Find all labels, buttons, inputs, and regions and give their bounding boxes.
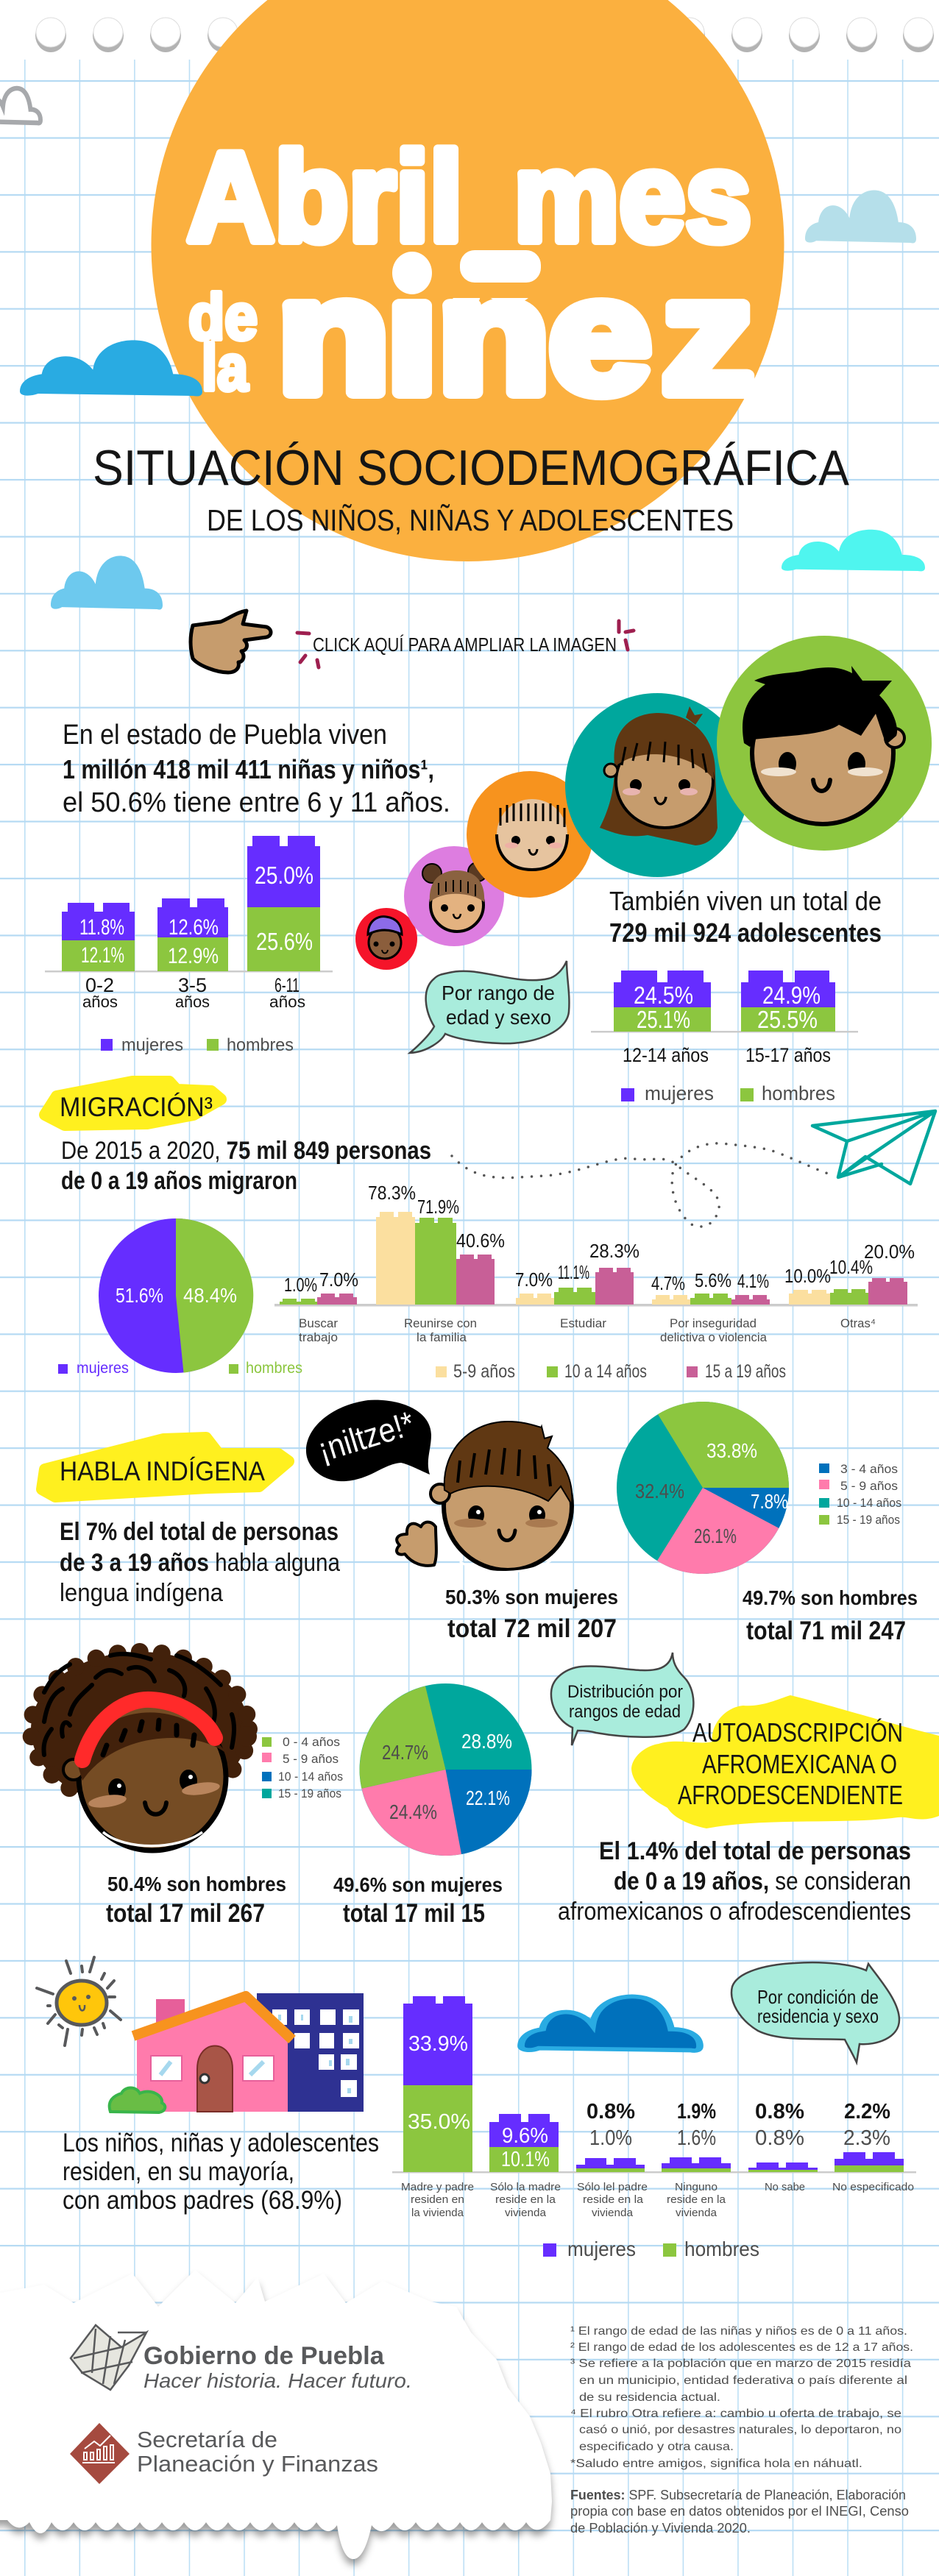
bar: 3-5 años xyxy=(157,898,228,1011)
heading: autoadscripción afromexicana xyxy=(631,1695,939,1828)
click call to action: CLICK AQUÍ PARA AMPLIAR LA IMAGEN xyxy=(313,634,617,656)
text: Puebla children total xyxy=(63,720,450,818)
pie chart: lengua indígena by age: 32.4% xyxy=(635,1480,684,1502)
text: habla indígena summary xyxy=(60,1518,340,1607)
pie chart: afro by age: 24.7% xyxy=(382,1741,428,1764)
circle: teal, girl face xyxy=(565,693,749,877)
bar: sólo el padre: 1.0% xyxy=(589,2126,632,2150)
text: adolescents total: 729 mil 924 adolescentes xyxy=(609,918,882,948)
icon: pink house xyxy=(133,1996,292,2112)
legend: lengua indígena ages xyxy=(819,1462,901,1527)
legend: pie migration xyxy=(58,1360,302,1377)
legend: adolescents: hombres xyxy=(762,1082,835,1104)
text: residencia summary: Los niños, niñas y adolescentes xyxy=(63,2129,379,2157)
cloud: pale blue xyxy=(805,190,916,244)
title: Abril mes de la niñez: niñez xyxy=(277,244,754,427)
circle: green, boy face xyxy=(717,636,932,851)
legend: mujeres / hombres: mujeres xyxy=(121,1035,183,1055)
title: Abril mes de la niñez: de xyxy=(188,280,258,353)
text: habla indígena summary: lengua indígena xyxy=(60,1579,223,1607)
speech bubble: por condición de residencia y sexo: residencia y sexo xyxy=(757,2005,879,2027)
circle: orange, child face xyxy=(467,771,593,898)
bar: ninguno: 1.9% xyxy=(677,2100,716,2123)
legend: age groups migration xyxy=(436,1361,786,1382)
speech bubble: distribución por rangos de edad xyxy=(551,1653,693,1745)
bar: no especificado: No especificado xyxy=(832,2181,914,2193)
group: inseguridad delictiva o violencia xyxy=(651,1269,770,1344)
bar: 0-2 años xyxy=(62,903,135,1011)
legend: mujeres / hombres: hombres xyxy=(227,1035,294,1055)
group: buscar trabajo: trabajo xyxy=(299,1330,338,1344)
heading: habla indígena: HABLA INDÍGENA xyxy=(60,1456,265,1486)
group: buscar trabajo: 1.0% xyxy=(284,1274,317,1296)
bar: 15-17 años: 24.9% xyxy=(762,982,821,1009)
pie chart: afro by age: 22.1% xyxy=(466,1786,510,1809)
speech bubble: por condición de residencia y sexo: Por condición de xyxy=(757,1986,879,2008)
bar: 12-14 años xyxy=(614,971,711,1066)
legend: age groups migration: 10 a 14 años xyxy=(564,1361,647,1382)
group: reunirse con la familia: la familia xyxy=(417,1330,467,1344)
text: afromexicanos summary: El 1.4% del total de personas xyxy=(599,1837,911,1865)
bar: 12-14 años: 25.1% xyxy=(637,1006,690,1033)
group: reunirse con la familia: 40.6% xyxy=(456,1230,505,1252)
cloud: dark blue xyxy=(521,1996,700,2051)
legend: afro ages: 10 - 14 años xyxy=(278,1770,343,1784)
orange sun circle xyxy=(152,0,784,561)
legend: afro ages: 15 - 19 años xyxy=(278,1786,341,1800)
pie chart: afro by age: 24.4% xyxy=(389,1800,437,1823)
text: habla indígena summary: de 3 a 19 años habla alguna xyxy=(60,1549,340,1577)
group: estudiar: 28.3% xyxy=(589,1240,639,1262)
bar: 0-2 años: años xyxy=(82,993,118,1011)
sources xyxy=(570,2488,909,2536)
footnotes: especificado y otra causa. xyxy=(579,2441,734,2453)
title: Abril mes de la niñez: Abril xyxy=(187,127,463,268)
footnotes: ¹ El rango de edad de las niñas y niños es de 0 a 11 años. xyxy=(570,2325,907,2338)
group: estudiar xyxy=(515,1240,639,1330)
panel: torn white paper xyxy=(0,2270,552,2559)
heading: migración xyxy=(45,1082,221,1125)
bar: 0-2 años: 0-2 xyxy=(85,974,114,996)
pie chart: migration by sex: 48.4% xyxy=(183,1284,237,1307)
stat: mujeres habla indígena xyxy=(445,1586,618,1643)
stat: hombres afro: 50.4% son hombres xyxy=(107,1873,286,1895)
bar: sólo la madre: vivienda xyxy=(505,2207,547,2219)
footnotes xyxy=(570,2325,913,2470)
group: buscar trabajo: 7.0% xyxy=(319,1269,358,1291)
group: estudiar: 11.1% xyxy=(558,1261,589,1283)
footnotes: en un municipio, entidad federativa o país diferente al xyxy=(579,2374,907,2387)
title: Abril mes de la niñez: la xyxy=(202,331,249,404)
logo: Gobierno de Puebla: Gobierno de Puebla xyxy=(143,2342,385,2370)
group: otras xyxy=(784,1241,915,1330)
bar chart: adolescents by age and sex xyxy=(591,971,858,1066)
bar: madre y padre: Madre y padre xyxy=(401,2181,474,2193)
bar: 6-11 años xyxy=(247,836,320,1011)
title: Abril mes de la niñez xyxy=(187,127,754,427)
footnotes: *Saludo entre amigos, significa hola en náhuatl. xyxy=(570,2458,862,2470)
bar: ninguno: Ninguno xyxy=(675,2181,717,2193)
bar: sólo la madre xyxy=(489,2114,561,2219)
speech bubble: por rango de edad y sexo: Por rango de xyxy=(442,982,555,1004)
sources: propia con base en datos obtenidos por el INEGI, Censo xyxy=(570,2504,909,2519)
group: otras: 20.0% xyxy=(864,1241,915,1263)
group: reunirse con la familia: 71.9% xyxy=(417,1196,459,1218)
stat: hombres afro xyxy=(106,1873,286,1928)
pie chart: lengua indígena by age: 33.8% xyxy=(706,1439,757,1462)
notebook holes xyxy=(35,18,934,52)
footnotes: de su residencia actual. xyxy=(579,2391,720,2404)
speech bubble: por rango de edad y sexo xyxy=(410,961,569,1053)
icon: bush xyxy=(110,2088,165,2112)
icon: gobierno emblem xyxy=(71,2325,146,2390)
circle: red, baby face xyxy=(355,908,417,970)
bar: sólo el padre xyxy=(576,2100,648,2219)
sources: Fuentes: SPF. Subsecretaría de Planeación, Elaboración xyxy=(570,2488,906,2502)
pie chart: lengua indígena by age: 26.1% xyxy=(694,1525,737,1547)
legend: age groups migration: 5-9 años xyxy=(453,1361,515,1382)
heading: migración: MIGRACIÓN³ xyxy=(60,1092,213,1122)
legend: afro ages: 5 - 9 años xyxy=(283,1752,339,1766)
circle: pink, toddler face xyxy=(404,846,504,946)
icon: pointing hand xyxy=(191,611,271,673)
speech bubble: niltze: ¡niltze!* xyxy=(313,1404,419,1469)
pie chart: lengua indígena by age xyxy=(617,1402,789,1574)
group: inseguridad delictiva o violencia: 4.7% xyxy=(651,1272,685,1294)
logo: Secretaría de Planeación y Finanzas xyxy=(70,2423,378,2484)
sources: de Población y Vivienda 2020. xyxy=(570,2521,751,2536)
legend: adolescents: mujeres xyxy=(645,1082,714,1104)
bar: no sabe: 0.8% xyxy=(755,2126,804,2150)
bar: no sabe: 0.8% xyxy=(755,2100,804,2123)
group: buscar trabajo xyxy=(280,1269,358,1344)
bar chart: residence condition xyxy=(392,1996,916,2219)
bar: madre y padre: 35.0% xyxy=(408,2110,470,2134)
bar: sólo el padre: Sólo lel padre xyxy=(577,2181,648,2193)
bar: madre y padre: residen en xyxy=(411,2193,464,2206)
bar: 3-5 años: años xyxy=(175,993,210,1011)
stat: mujeres habla indígena: 50.3% son mujeres xyxy=(445,1586,618,1608)
cloud: blue xyxy=(20,340,202,397)
icon: boy face with waving hand xyxy=(397,1422,572,1572)
icon: apartment building xyxy=(257,1993,364,2112)
footnotes: ² El rango de edad de los adolescentes es de 12 a 17 años. xyxy=(570,2341,913,2354)
legend: residencia: mujeres xyxy=(567,2238,636,2260)
legend: age groups migration: 15 a 19 años xyxy=(705,1361,786,1382)
bar: sólo el padre: reside en la xyxy=(583,2193,644,2206)
subheading: DE LOS NIÑOS, NIÑAS Y ADOLESCENTES xyxy=(207,503,734,537)
logo: Gobierno de Puebla xyxy=(71,2325,412,2392)
dotted flight path xyxy=(452,1143,832,1227)
stat: mujeres afro: 49.6% son mujeres xyxy=(333,1873,503,1896)
heading: autoadscripción afromexicana: AFROMEXICANA O xyxy=(702,1749,897,1779)
bar: 6-11 años: años xyxy=(269,993,305,1011)
pie chart: afro by age xyxy=(359,1683,531,1856)
group: inseguridad delictiva o violencia: 5.6% xyxy=(695,1269,731,1291)
group: otras: Otras⁴ xyxy=(840,1316,876,1330)
legend: lengua indígena ages: 3 - 4 años xyxy=(840,1462,898,1476)
bar: no especificado: 2.3% xyxy=(843,2126,890,2150)
text: Puebla children total: 1 millón 418 mil 411 niñas y niños¹, xyxy=(63,754,434,784)
text: residencia summary: con ambos padres (68.9%) xyxy=(63,2186,342,2215)
speech bubble: por condición de residencia y sexo xyxy=(731,1962,899,2062)
text: adolescents total xyxy=(609,886,882,948)
bar chart: reasons for migrating xyxy=(274,1182,918,1344)
text: residencia summary: residen, en su mayoría, xyxy=(63,2157,294,2186)
legend: mujeres / hombres xyxy=(101,1035,294,1055)
bar: sólo la madre: 10.1% xyxy=(501,2148,550,2171)
stat: hombres habla indígena xyxy=(743,1586,918,1645)
bar: madre y padre: la vivienda xyxy=(411,2207,464,2219)
bar: no especificado xyxy=(832,2100,914,2193)
legend: residencia xyxy=(543,2238,759,2260)
text: afromexicanos summary xyxy=(558,1837,911,1926)
text: residencia summary xyxy=(63,2129,379,2215)
footnotes: ⁴ El rubro Otra refiere a: cambio u oferta de trabajo, se xyxy=(570,2408,901,2420)
legend: lengua indígena ages: 10 - 14 años xyxy=(837,1496,901,1510)
stat: hombres habla indígena: total 71 mil 247 xyxy=(746,1617,906,1645)
text: migración summary: De 2015 a 2020, 75 mil 849 personas xyxy=(61,1137,431,1165)
bar: no sabe xyxy=(748,2100,818,2193)
text: migración summary xyxy=(61,1137,431,1195)
bar: 6-11 años: 25.6% xyxy=(256,928,313,955)
bar: 0-2 años: 12.1% xyxy=(81,943,124,968)
click call to action xyxy=(297,621,634,667)
group: otras: 10.4% xyxy=(829,1256,873,1278)
stat: mujeres afro: total 17 mil 15 xyxy=(343,1899,485,1928)
group: inseguridad delictiva o violencia: 4.1% xyxy=(737,1270,769,1292)
group: reunirse con la familia xyxy=(368,1182,505,1344)
legend: afro ages: 0 - 4 años xyxy=(283,1735,340,1749)
footnotes: ³ Se refiere a la población que en marzo de 2015 residía xyxy=(570,2357,911,2370)
bar chart: children by age and sex xyxy=(45,836,333,1011)
logo: Secretaría de Planeación y Finanzas: Planeación y Finanzas xyxy=(137,2451,378,2477)
group: otras: 10.0% xyxy=(784,1265,831,1287)
legend: pie migration: mujeres xyxy=(77,1360,129,1377)
icon: waving hand xyxy=(397,1522,436,1566)
icon: paper plane xyxy=(812,1111,935,1184)
text: habla indígena summary: El 7% del total de personas xyxy=(60,1518,339,1546)
legend: lengua indígena ages: 15 - 19 años xyxy=(837,1513,900,1527)
bar: madre y padre xyxy=(401,1996,474,2219)
bar: sólo el padre: 0.8% xyxy=(587,2100,635,2123)
group: estudiar: Estudiar xyxy=(560,1316,606,1330)
group: buscar trabajo: Buscar xyxy=(299,1316,338,1330)
logo: Gobierno de Puebla: Hacer historia. Hacer futuro. xyxy=(143,2369,412,2392)
group: inseguridad delictiva o violencia: delictiva o violencia xyxy=(660,1330,768,1344)
bar: ninguno: vivienda xyxy=(676,2207,717,2219)
bar: 6-11 años: 25.0% xyxy=(255,862,313,889)
stat: mujeres habla indígena: total 72 mil 207 xyxy=(447,1614,617,1643)
bar: 3-5 años: 12.6% xyxy=(169,915,219,940)
cloud: gray outline xyxy=(0,88,40,123)
text: adolescents total: También viven un total de xyxy=(609,886,882,916)
bar: 3-5 años: 3-5 xyxy=(178,974,207,996)
group: reunirse con la familia: Reunirse con xyxy=(404,1316,477,1330)
bar: ninguno: reside en la xyxy=(667,2193,726,2206)
cloud: cyan xyxy=(782,530,925,571)
bar: 15-17 años: 25.5% xyxy=(757,1006,818,1033)
title: Abril mes de la niñez: mes xyxy=(514,127,751,268)
bar: 15-17 años xyxy=(741,971,835,1066)
legend: pie migration: hombres xyxy=(246,1360,302,1377)
stat: hombres habla indígena: 49.7% son hombres xyxy=(743,1586,918,1609)
stat: hombres afro: total 17 mil 267 xyxy=(106,1899,265,1928)
bar: 0-2 años: 11.8% xyxy=(79,915,124,940)
icon: sun xyxy=(37,1957,121,2045)
cloud: sky blue xyxy=(51,556,163,610)
logo: Secretaría de Planeación y Finanzas: Secretaría de xyxy=(137,2427,277,2452)
bar: ninguno: 1.6% xyxy=(677,2126,716,2150)
pie chart: afro by age: 28.8% xyxy=(461,1730,512,1753)
bar: 6-11 años: 6-11 xyxy=(274,974,300,996)
bar: no sabe: No sabe xyxy=(765,2181,805,2193)
text: afromexicanos summary: de 0 a 19 años, se consideran xyxy=(614,1867,911,1895)
bar: 12-14 años: 24.5% xyxy=(634,982,693,1009)
heading: situación sociodemográfica: SITUACIÓN SOCIODEMOGRÁFICA xyxy=(93,440,850,496)
bar: 15-17 años: 15-17 años xyxy=(745,1044,831,1066)
legend: lengua indígena ages: 5 - 9 años xyxy=(840,1479,898,1493)
legend: adolescents xyxy=(621,1082,835,1104)
speech bubble: por rango de edad y sexo: edad y sexo xyxy=(446,1006,551,1029)
heading: habla indígena xyxy=(42,1438,288,1497)
bar: ninguno xyxy=(662,2100,731,2219)
pie chart: lengua indígena by age: 7.8% xyxy=(751,1490,788,1513)
bar: no especificado: 2.2% xyxy=(844,2100,890,2123)
icon: afro girl face xyxy=(31,1652,257,1851)
text: Puebla children total: En el estado de Puebla viven xyxy=(63,720,387,751)
bar: 3-5 años: 12.9% xyxy=(168,944,219,968)
speech bubble: distribución por rangos de edad: Distribución por xyxy=(567,1682,683,1702)
footnotes: casó o unió, por desastres naturales, lo deportaron, no xyxy=(579,2424,901,2436)
bar: sólo el padre: vivienda xyxy=(592,2207,634,2219)
text: migración summary: de 0 a 19 años migraron xyxy=(61,1167,297,1195)
bar: sólo la madre: Sólo la madre xyxy=(490,2181,561,2193)
bar: sólo la madre: reside en la xyxy=(495,2193,556,2206)
legend: residencia: hombres xyxy=(684,2238,759,2260)
group: estudiar: 7.0% xyxy=(515,1269,553,1291)
pie chart: migration by sex: 51.6% xyxy=(116,1284,163,1307)
stat: mujeres afro xyxy=(333,1873,503,1928)
pie chart: migration by sex xyxy=(99,1218,253,1373)
group: reunirse con la familia: 78.3% xyxy=(368,1182,416,1204)
bar: madre y padre: 33.9% xyxy=(408,2032,468,2056)
text: Puebla children total: el 50.6% tiene entre 6 y 11 años. xyxy=(63,787,450,818)
group: inseguridad delictiva o violencia: Por inseguridad xyxy=(670,1316,756,1330)
speech bubble: distribución por rangos de edad: rangos de edad xyxy=(569,1702,681,1722)
bar: sólo la madre: 9.6% xyxy=(502,2124,548,2148)
legend: afro ages xyxy=(262,1735,343,1800)
bar: 12-14 años: 12-14 años xyxy=(623,1044,709,1066)
